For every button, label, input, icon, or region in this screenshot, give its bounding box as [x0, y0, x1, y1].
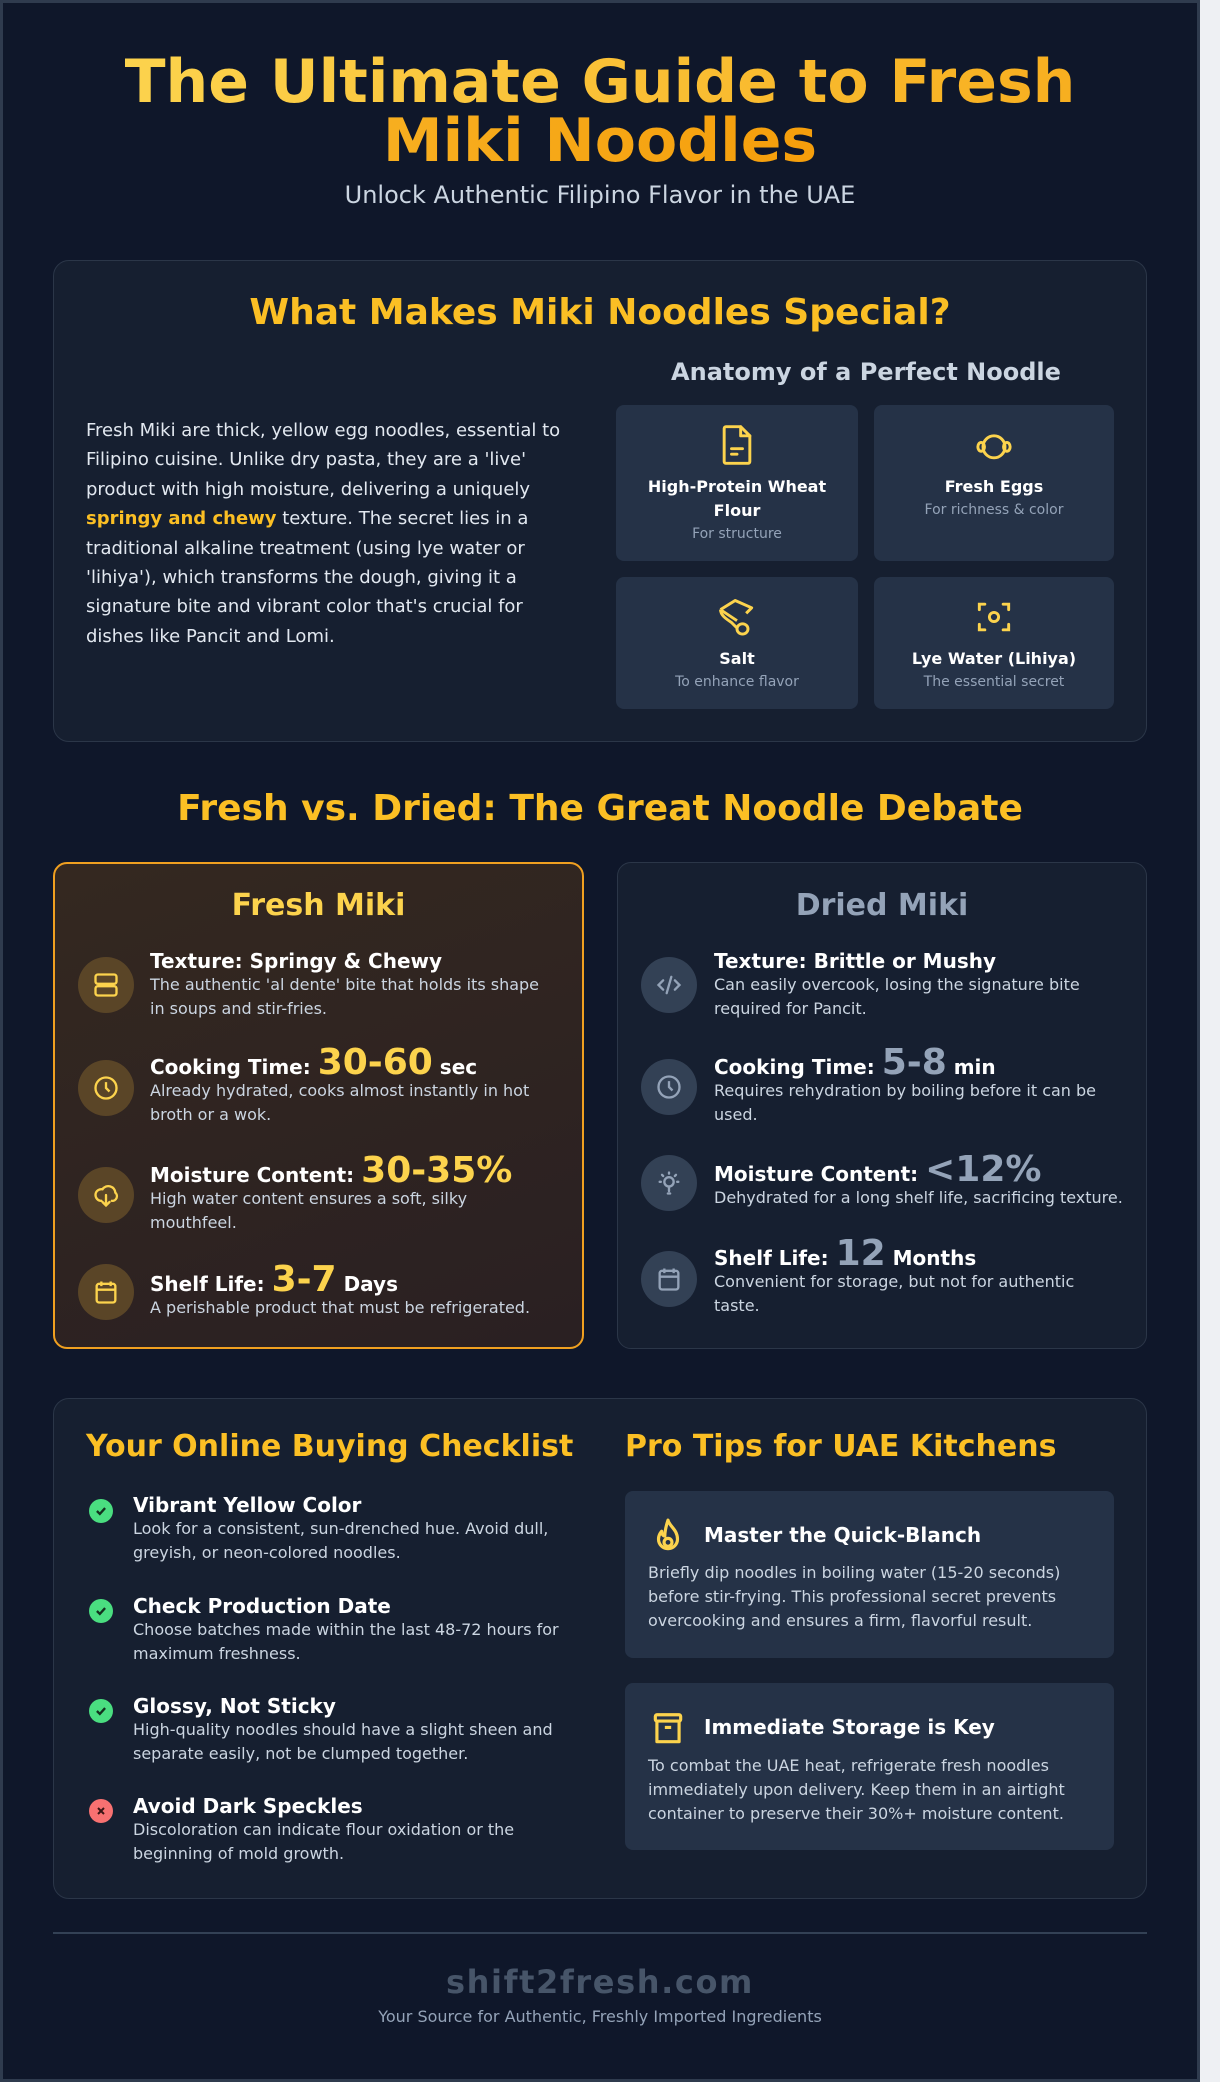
footer: tagline: Your Source for Authentic, Freshly Imported Ingredients	[378, 2007, 822, 2026]
card: flour: For structure	[692, 526, 782, 542]
row: fresh texture	[150, 949, 539, 1018]
row: dried shelf life: Shelf Life: 12 Months	[714, 1233, 976, 1274]
row: dried shelf life: taste.	[714, 1296, 760, 1315]
item: speckles	[133, 1794, 514, 1863]
row: fresh texture: in soups and stir-fries.	[150, 999, 327, 1018]
icon: fresh clock	[78, 1060, 134, 1116]
heading: anatomy: Anatomy of a Perfect Noodle	[671, 358, 1061, 386]
card title: Dried Miki	[796, 888, 968, 923]
row: fresh moisture: mouthfeel.	[150, 1213, 237, 1232]
icon: flame	[656, 1518, 680, 1550]
card: flour: High-Protein Wheat	[648, 477, 826, 496]
tip title: Immediate Storage is Key	[704, 1715, 995, 1739]
card: eggs	[874, 405, 1114, 561]
row: fresh shelf life	[150, 1259, 530, 1317]
item: vibrant: Vibrant Yellow Color	[133, 1493, 361, 1517]
row: fresh moisture	[150, 1150, 512, 1232]
card: flour: Flour	[714, 501, 760, 520]
row: fresh cooking time: Already hydrated, cooks almost instantly in hot	[150, 1081, 529, 1100]
tip text: Briefly dip noodles in boiling water (15-20 seconds) before stir-frying. This professional secret prevents overcooking and ensures a firm, flavorful result.	[648, 1563, 1060, 1630]
card: lye water	[874, 577, 1114, 709]
panel: dried miki	[617, 862, 1147, 1349]
panel: what makes miki special	[53, 260, 1147, 742]
icon: focus	[978, 602, 1010, 632]
icon: eggs	[976, 434, 1012, 460]
row: dried shelf life	[714, 1233, 1074, 1315]
item: glossy: Glossy, Not Sticky	[133, 1694, 336, 1718]
row: dried cooking: used.	[714, 1105, 758, 1124]
row: dried texture: required for Pancit.	[714, 999, 867, 1018]
card: eggs: For richness & color	[925, 502, 1063, 518]
tip card: quick blanch	[625, 1491, 1114, 1658]
tip title: Master the Quick-Blanch	[704, 1523, 981, 1547]
row: dried cooking	[714, 1042, 1096, 1124]
icon: check 3	[89, 1699, 113, 1723]
heading: pro tips: Pro Tips for UAE Kitchens	[625, 1429, 1056, 1464]
row: dried moisture: Moisture Content: <12%	[714, 1149, 1041, 1190]
item: production date: Choose batches made within the last 48-72 hours for	[133, 1620, 559, 1639]
icon: dried calendar	[641, 1251, 697, 1307]
text block: description: Fresh Miki are thick, yellow egg noodles, essential to Filipino cuisine. Unlike dry pasta, they are a 'live' product with high moisture, delivering a uniquely springy and chewy texture. The secret lies in a traditional alkaline treatment (using lye water or 'lihiya'), which transforms the dough, giving it a signature bite and vibrant color that's crucial for dishes like Pancit and Lomi.	[86, 420, 560, 647]
row: dried texture: Texture: Brittle or Mushy	[714, 949, 996, 973]
item: vibrant: greyish, or neon-colored noodles.	[133, 1543, 401, 1562]
item: speckles: Discoloration can indicate flour oxidation or the	[133, 1820, 514, 1839]
row: fresh moisture: High water content ensures a soft, silky	[150, 1189, 467, 1208]
heading: checklist: Your Online Buying Checklist	[86, 1429, 573, 1464]
row: dried shelf life: Convenient for storage, but not for authentic	[714, 1272, 1074, 1291]
card: lye water: Lye Water (Lihiya)	[912, 649, 1076, 668]
row: dried cooking: Cooking Time: 5-8 min	[714, 1042, 996, 1083]
row: fresh shelf life: A perishable product that must be refrigerated.	[150, 1298, 530, 1317]
item: production date: maximum freshness.	[133, 1644, 301, 1663]
heading: What Makes Miki Noodles Special?	[249, 292, 951, 333]
row: fresh cooking time: broth or a wok.	[150, 1105, 271, 1124]
title	[125, 47, 1075, 176]
row: fresh shelf life: Shelf Life: 3-7 Days	[150, 1259, 398, 1300]
tip text: To combat the UAE heat, refrigerate fresh noodles immediately upon delivery. Keep them in an airtight container to preserve their 30%+ moisture content.	[648, 1756, 1065, 1823]
card: lye water: The essential secret	[924, 674, 1064, 690]
icon: cross	[89, 1799, 113, 1823]
icon: fresh texture	[78, 957, 134, 1013]
icon: salt	[719, 599, 754, 636]
item: vibrant: Look for a consistent, sun-drenched hue. Avoid dull,	[133, 1519, 548, 1538]
card: eggs: Fresh Eggs	[945, 477, 1043, 496]
row: fresh texture: The authentic 'al dente' bite that holds its shape	[150, 975, 539, 994]
item: speckles: beginning of mold growth.	[133, 1844, 344, 1863]
row: dried texture	[714, 949, 1080, 1018]
card: salt: Salt	[719, 649, 755, 668]
title: The Ultimate Guide to Fresh	[125, 47, 1075, 117]
row: fresh texture: Texture: Springy & Chewy	[150, 949, 442, 973]
item: speckles: Avoid Dark Speckles	[133, 1794, 363, 1818]
card: salt	[616, 577, 858, 709]
card: salt: To enhance flavor	[675, 674, 799, 690]
row: dried cooking: Requires rehydration by boiling before it can be	[714, 1081, 1096, 1100]
icon: fresh moisture	[78, 1167, 134, 1223]
row: dried moisture: Dehydrated for a long shelf life, sacrificing texture.	[714, 1188, 1123, 1207]
card title: Fresh Miki	[232, 888, 405, 923]
icon: archive	[654, 1713, 682, 1744]
icon: fresh calendar	[78, 1264, 134, 1320]
row: dried moisture	[714, 1149, 1123, 1207]
heading: fresh vs dried: Fresh vs. Dried: The Great Noodle Debate	[177, 788, 1023, 829]
item: production date	[133, 1594, 559, 1663]
subtitle: Unlock Authentic Filipino Flavor in the UAE	[345, 181, 855, 209]
icon: dried bulb	[641, 1155, 697, 1211]
tip card: storage	[625, 1683, 1114, 1850]
icon: file	[722, 425, 752, 465]
item: glossy: High-quality noodles should have a slight sheen and	[133, 1720, 553, 1739]
item: vibrant	[133, 1493, 548, 1562]
icon: check 2	[89, 1599, 113, 1623]
row: fresh cooking time: Cooking Time: 30-60 sec	[150, 1042, 477, 1083]
footer: brand: shift2fresh.com	[446, 1963, 754, 2001]
icon: dried clock	[641, 1059, 697, 1115]
panel: checklist and tips	[53, 1398, 1147, 1899]
item: production date: Check Production Date	[133, 1594, 391, 1618]
title: Miki Noodles	[383, 106, 817, 176]
panel: fresh miki	[53, 862, 584, 1349]
card: flour	[616, 405, 858, 561]
icon: dried code	[641, 957, 697, 1013]
icon: check 1	[89, 1499, 113, 1523]
row: dried texture: Can easily overcook, losing the signature bite	[714, 975, 1080, 994]
item: glossy	[133, 1694, 553, 1763]
row: fresh moisture: Moisture Content: 30-35%	[150, 1150, 512, 1191]
row: fresh cooking time	[150, 1042, 529, 1124]
item: glossy: separate easily, not be clumped together.	[133, 1744, 468, 1763]
